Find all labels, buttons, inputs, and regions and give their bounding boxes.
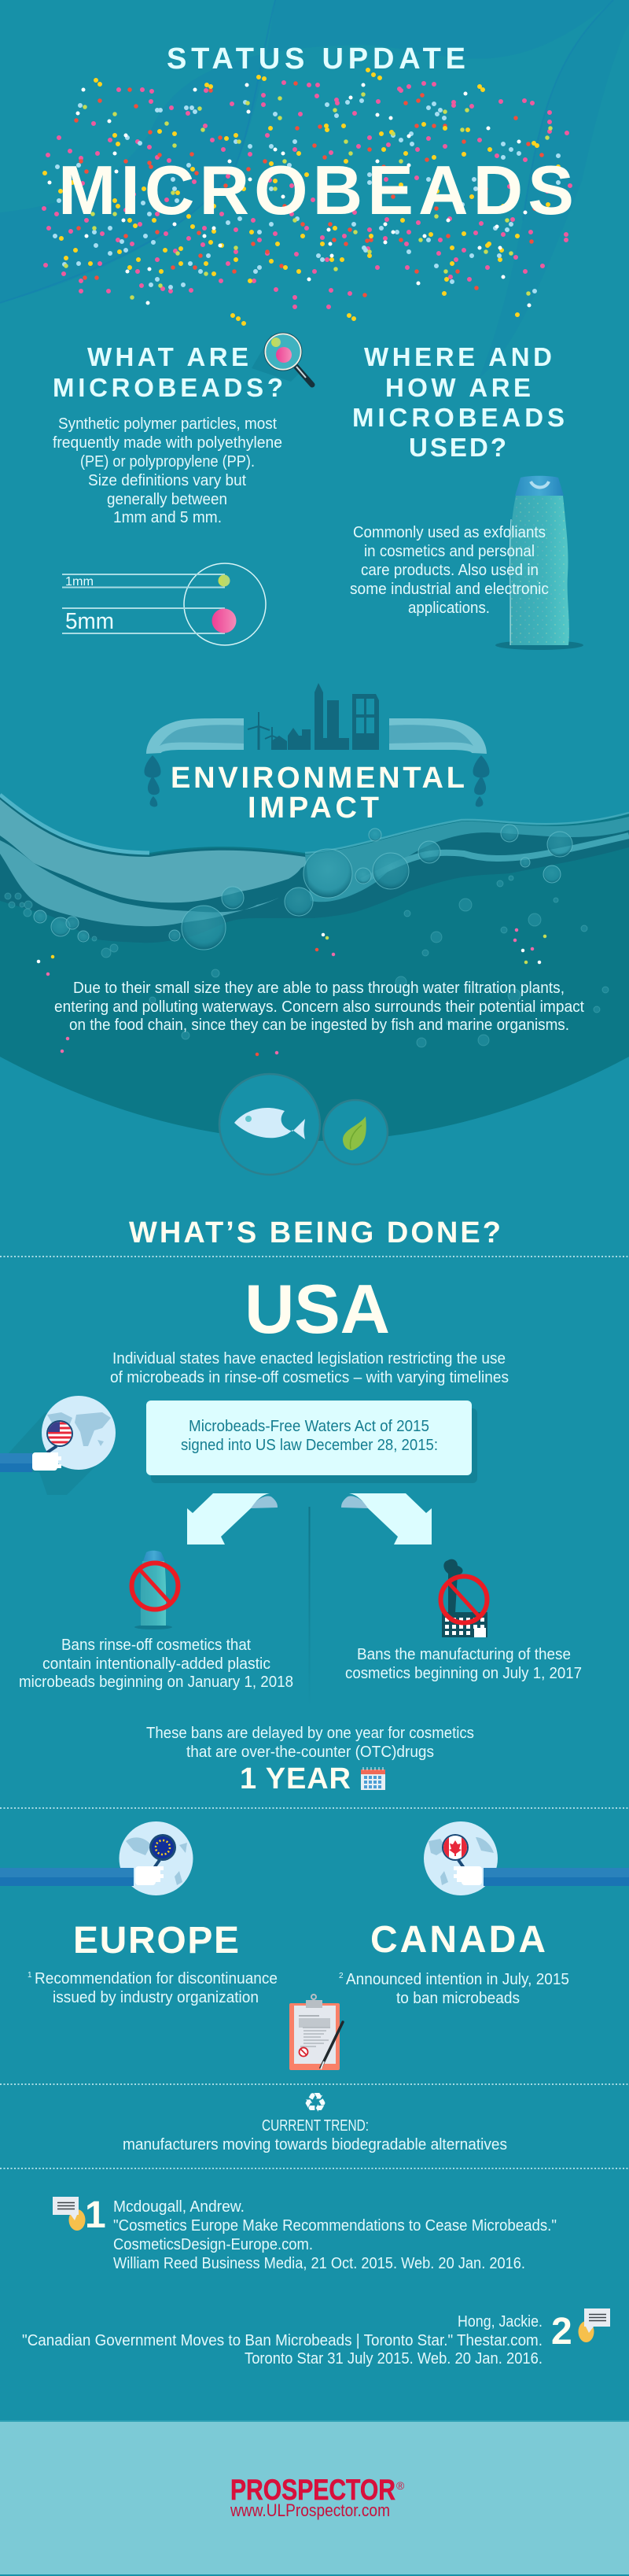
diagram: bead size scale: [62, 563, 266, 645]
text: usa intro: of microbeads in rinse-off cosmetics – with varying timelines: [110, 1369, 509, 1386]
text: rinse-off ban: microbeads beginning on January 1, 2018: [19, 1674, 293, 1691]
text: citation 1: CosmeticsDesign-Europe.com.: [113, 2236, 313, 2253]
icon: leaf in circle: [323, 1100, 388, 1164]
text: microbead uses: Commonly used as exfoliants: [353, 524, 546, 541]
text: europe recommendation: [28, 1970, 278, 2006]
text: microbeads definition: [53, 415, 282, 526]
heading: where and how are microbeads used: [352, 342, 565, 462]
text: microbeads definition: Synthetic polymer particles, most: [58, 415, 277, 433]
text: microbead uses: care products. Also used in: [361, 562, 539, 579]
text: current trend: [123, 2117, 507, 2153]
logo: prospector: [230, 2474, 405, 2520]
arrow: left branch: [187, 1493, 278, 1544]
text: environmental impact: entering and polluting waterways. Concern also surrounds their potential impact: [54, 998, 584, 1016]
icon: globe with Canadian flag magnifier: [424, 1821, 629, 1895]
text: europe recommendation: 1: [28, 1971, 32, 1980]
title: status update: STATUS UPDATE: [167, 42, 465, 76]
heading: europe: EUROPE: [73, 1920, 239, 1962]
heading: where and how are microbeads used: HOW ARE: [385, 373, 531, 402]
heading: what are microbeads: MICROBEADS?: [53, 373, 283, 402]
icon: calendar: [361, 1767, 385, 1790]
citation number 2: 2: [551, 2311, 572, 2353]
icon: citation 2 note and coin: [579, 2308, 610, 2342]
text: manufacturing ban: cosmetics beginning on July 1, 2017: [345, 1665, 582, 1682]
text: usa intro: Individual states have enacted legislation restricting the use: [112, 1350, 506, 1367]
text: citation 2: "Canadian Government Moves to Ban Microbeads | Toronto Star." Thestar.com.: [22, 2332, 543, 2349]
callout: microbeads-free waters act: signed into US law December 28, 2015:: [181, 1437, 438, 1454]
text: canada announcement: to ban microbeads: [396, 1990, 520, 2007]
footer band: [0, 2420, 629, 2576]
heading: environmental impact: IMPACT: [248, 792, 379, 825]
text: otc delay: [146, 1725, 474, 1761]
text: microbeads definition: generally between: [107, 491, 227, 508]
callout: microbeads-free waters act: [146, 1401, 477, 1483]
icon: banned factory: [440, 1559, 487, 1637]
logo: prospector: ®: [396, 2479, 405, 2492]
icon: left pipe with drips: [144, 718, 244, 807]
text: otc delay: that are over-the-counter (OTC)drugs: [186, 1744, 434, 1761]
icon: cosmetic bottle: [495, 476, 583, 650]
icon: recycle symbol: ♻: [303, 2087, 327, 2119]
water body: [0, 795, 629, 1141]
logo: prospector: PROSPECTOR: [230, 2474, 395, 2506]
logo: prospector: www.ULProspector.com: [230, 2500, 390, 2520]
text: rinse-off ban: [19, 1637, 293, 1691]
text: rinse-off ban: contain intentionally-added plastic: [42, 1655, 270, 1673]
diagram: bead size scale: 1mm: [65, 575, 94, 589]
heading: where and how are microbeads used: USED?: [409, 433, 506, 462]
text: environmental impact: [54, 980, 584, 1034]
callout: microbeads-free waters act: Microbeads-Free Waters Act of 2015: [189, 1418, 429, 1435]
text: europe recommendation: issued by industry organization: [53, 1989, 259, 2006]
heading: environmental impact: ENVIRONMENTAL: [171, 762, 465, 795]
beads in water: [39, 930, 545, 1079]
water bubbles: [34, 825, 572, 950]
text: microbead uses: some industrial and electronic: [350, 581, 549, 598]
text: microbeads definition: frequently made with polyethylene: [53, 434, 282, 452]
text: usa intro: [110, 1350, 509, 1386]
heading: environmental impact: [171, 762, 465, 825]
text: rinse-off ban: Bans rinse-off cosmetics that: [61, 1637, 251, 1654]
text: citation 1: William Reed Business Media, 21 Oct. 2015. Web. 20 Jan. 2016.: [113, 2255, 525, 2272]
icon: magnifying glass: [252, 333, 312, 385]
heading: 1 year: 1 YEAR: [240, 1762, 351, 1795]
text: current trend: manufacturers moving towards biodegradable alternatives: [123, 2136, 507, 2153]
heading: what's being done: WHAT’S BEING DONE?: [129, 1216, 501, 1249]
text: environmental impact: on the food chain, since they can be ingested by fish and marine organisms.: [69, 1017, 569, 1034]
text: manufacturing ban: Bans the manufacturing of these: [357, 1646, 571, 1663]
icon: fish in circle: [219, 1074, 320, 1175]
icon: clipboard: [289, 1995, 343, 2070]
icon: globe with US flag magnifier: [0, 1396, 116, 1495]
heading: what are microbeads: [53, 342, 283, 402]
arrow: right branch: [341, 1493, 432, 1544]
text: microbeads definition: Size definitions vary but: [88, 472, 246, 489]
divider between bans: [308, 1507, 310, 1707]
diagram: bead size scale: 5mm: [65, 609, 114, 634]
icon: citation 1 note and coin: [53, 2197, 85, 2231]
small drifting bubbles: [5, 876, 609, 1047]
text: citation 2: Toronto Star 31 July 2015. Web. 20 Jan. 2016.: [245, 2350, 543, 2367]
text: citation 2: [22, 2313, 543, 2367]
text: microbead uses: [350, 524, 549, 617]
icon: banned cosmetic bottle: [132, 1551, 178, 1629]
text: microbead uses: applications.: [408, 600, 490, 617]
text: microbeads definition: 1mm and 5 mm.: [113, 509, 222, 526]
text: microbeads definition: (PE) or polypropylene (PP).: [80, 453, 255, 471]
text: canada announcement: [339, 1971, 569, 2007]
text: otc delay: These bans are delayed by one year for cosmetics: [146, 1725, 474, 1742]
text: citation 1: [113, 2198, 557, 2272]
heading: where and how are microbeads used: WHERE AND: [364, 342, 552, 371]
text: manufacturing ban: [345, 1646, 582, 1682]
text: canada announcement: Announced intention in July, 2015: [346, 1971, 569, 1988]
icon: globe with EU flag magnifier: [0, 1821, 193, 1895]
heading: usa: USA: [245, 1270, 390, 1348]
background mesh ribbons: [0, 0, 629, 378]
icon: city skyline: [248, 683, 379, 750]
text: current trend: CURRENT TREND:: [262, 2117, 369, 2135]
icon: right pipe with drips: [389, 718, 490, 807]
title: microbeads: MICROBEADS: [58, 151, 574, 229]
text: microbead uses: in cosmetics and personal: [364, 543, 535, 560]
text: citation 1: Mcdougall, Andrew.: [113, 2198, 245, 2216]
heading: where and how are microbeads used: MICROBEADS: [352, 403, 565, 432]
text: europe recommendation: Recommendation for discontinuance: [35, 1970, 278, 1987]
microbeads scatter: [44, 70, 570, 323]
heading: canada: CANADA: [370, 1919, 546, 1961]
text: citation 2: Hong, Jackie.: [458, 2313, 543, 2331]
text: environmental impact: Due to their small size they are able to pass through water filtration plants,: [73, 980, 565, 997]
text: canada announcement: 2: [339, 1972, 344, 1980]
text: citation 1: "Cosmetics Europe Make Recommendations to Cease Microbeads.": [113, 2217, 557, 2235]
heading: what are microbeads: WHAT ARE: [87, 342, 248, 371]
citation number 1: 1: [85, 2194, 106, 2236]
